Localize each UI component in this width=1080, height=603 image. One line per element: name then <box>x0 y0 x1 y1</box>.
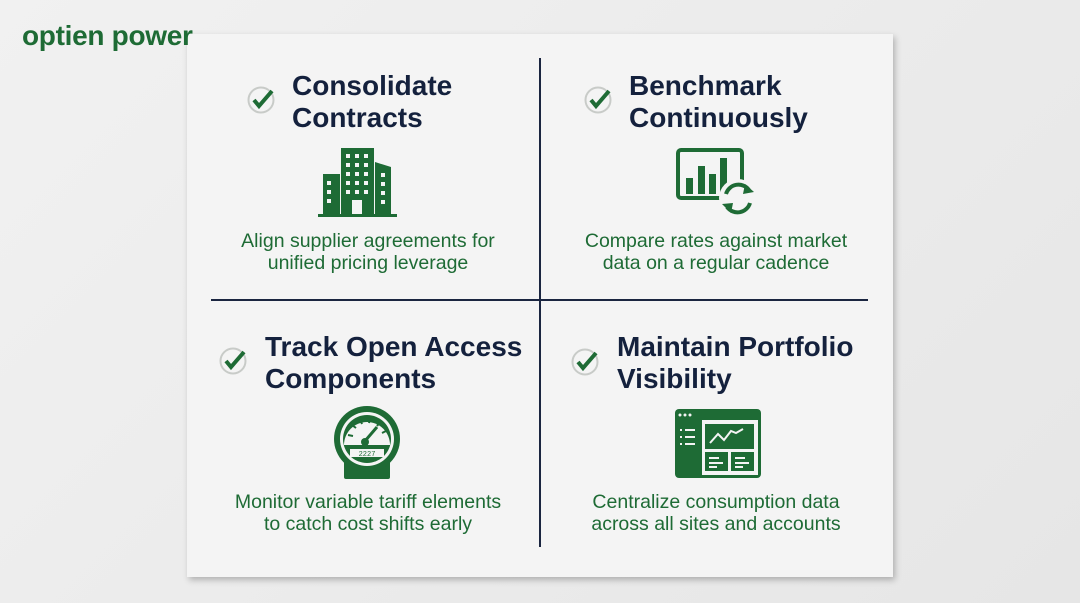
panel: benchmark continuously <box>584 70 848 274</box>
heading <box>292 70 452 133</box>
description: across all sites and accounts <box>591 513 841 535</box>
panel: maintain portfolio visibility <box>572 331 853 535</box>
heading: Maintain Portfolio <box>617 331 853 362</box>
logo: optien power <box>22 20 193 51</box>
description: unified pricing leverage <box>268 252 468 274</box>
description: Monitor variable tariff elements <box>235 491 501 513</box>
description: to catch cost shifts early <box>264 513 472 535</box>
description <box>585 230 848 274</box>
icon: check <box>584 86 612 114</box>
card <box>187 34 893 577</box>
heading <box>617 331 853 394</box>
icon: check <box>248 86 274 114</box>
description <box>591 491 841 535</box>
description: Align supplier agreements for <box>241 230 495 252</box>
heading: Track Open Access <box>265 331 522 362</box>
description: data on a regular cadence <box>603 252 829 274</box>
icon: check <box>572 348 598 376</box>
heading: Visibility <box>617 363 732 394</box>
icon: chart with refresh <box>676 148 754 214</box>
heading: Contracts <box>292 102 423 133</box>
icon: dashboard <box>675 409 761 478</box>
icon: meter: 2227 <box>359 451 375 459</box>
panel: consolidate contracts <box>241 70 495 274</box>
heading: Components <box>265 363 436 394</box>
heading: Benchmark <box>629 70 782 101</box>
heading: Continuously <box>629 102 808 133</box>
icon: meter <box>334 406 400 479</box>
heading: Consolidate <box>292 70 452 101</box>
panel: track open access <box>220 331 522 535</box>
description: Compare rates against market <box>585 230 847 252</box>
icon: check <box>220 348 246 374</box>
description <box>235 491 501 535</box>
heading <box>629 70 808 133</box>
description: Centralize consumption data <box>592 491 840 513</box>
icon: building <box>318 148 397 217</box>
heading <box>265 331 522 394</box>
description <box>241 230 495 274</box>
